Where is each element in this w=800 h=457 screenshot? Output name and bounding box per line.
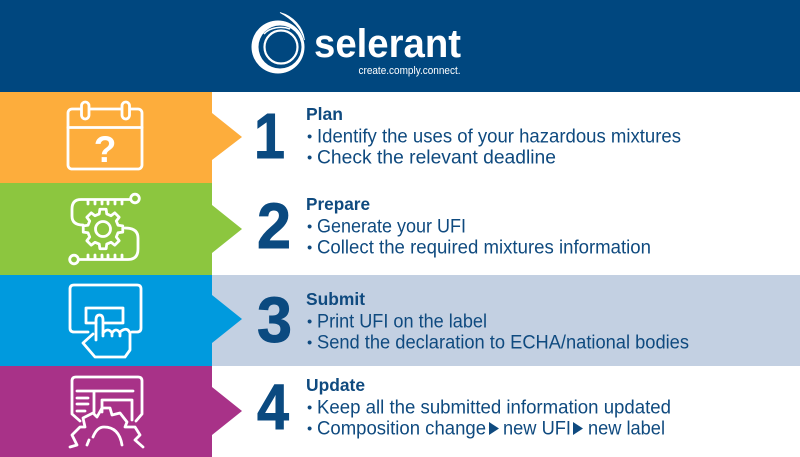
number 1: 1 <box>254 100 285 172</box>
purple band with arrow <box>0 366 242 457</box>
panel: step 4 update <box>0 366 671 457</box>
panel: step 3 submit <box>0 275 689 366</box>
text: submit <box>306 289 689 354</box>
text: plan: • <box>307 150 312 166</box>
text: update: new UFI <box>503 418 571 440</box>
logo wordmark: selerant <box>314 22 461 66</box>
icon: calendar with question mark <box>68 102 142 170</box>
icon: gear with circuit <box>70 194 139 264</box>
header band <box>0 0 800 92</box>
text: prepare: Prepare <box>306 194 370 214</box>
text: submit: • <box>307 314 312 330</box>
text: prepare: Collect the required mixtures information <box>317 238 651 258</box>
text: update: new label <box>588 418 665 440</box>
text: submit: Submit <box>306 289 365 309</box>
logo tagline: create.comply.connect. <box>358 65 460 77</box>
text: plan: Identify the uses of your hazardous mixtures <box>317 126 681 148</box>
text: update: • <box>307 400 312 416</box>
text: update: • <box>307 420 312 438</box>
text: update: Update <box>306 375 365 395</box>
row 3 background <box>212 275 800 366</box>
text: submit: Print UFI on the label <box>317 312 487 332</box>
blue band with arrow <box>0 275 242 366</box>
text: update: Keep all the submitted information updated <box>317 398 671 418</box>
text: prepare: • <box>307 240 312 256</box>
orange band with arrow <box>0 92 242 183</box>
icon: calendar with question mark: ? <box>94 129 116 170</box>
logo: selerant <box>252 12 461 77</box>
panel: step 1 plan <box>0 92 681 183</box>
text: prepare: Generate your UFI <box>317 216 466 238</box>
text: plan: • <box>307 128 312 146</box>
number 4: 4 <box>257 371 289 443</box>
logo swirl icon <box>252 12 304 74</box>
arrow: to new label <box>573 422 583 435</box>
icon: interface with gear <box>70 377 143 447</box>
text: plan <box>306 104 681 168</box>
text: prepare: • <box>307 218 312 236</box>
text: plan: Plan <box>306 104 343 124</box>
icon: hand pressing button <box>70 285 141 357</box>
arrow: to new UFI <box>489 422 499 435</box>
text: submit: Send the declaration to ECHA/national bodies <box>317 332 689 354</box>
number 2: 2 <box>257 190 291 262</box>
text: submit: • <box>307 334 312 352</box>
panel: step 2 prepare <box>0 183 651 275</box>
text: plan: Check the relevant deadline <box>317 148 556 168</box>
number 3: 3 <box>257 284 292 356</box>
green band with arrow <box>0 183 242 275</box>
text: update: Composition change <box>317 418 486 440</box>
text: prepare <box>306 194 651 258</box>
text: update <box>306 375 671 440</box>
